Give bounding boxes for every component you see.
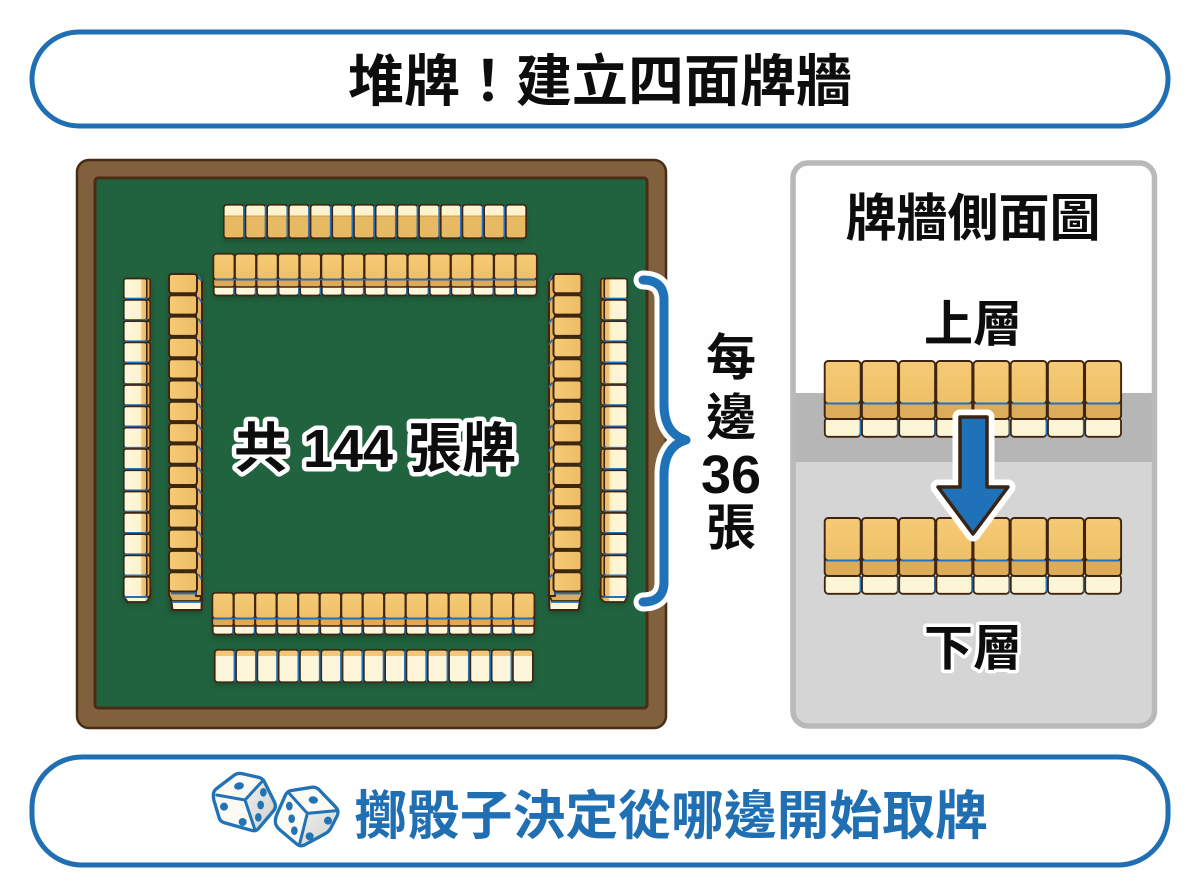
side label: 36 tiles per side: 張 — [706, 500, 756, 556]
title text: 堆牌！建立四面牌牆 — [348, 50, 852, 113]
side label: 36 tiles per side: 每 — [706, 330, 756, 386]
grey band — [793, 393, 1154, 462]
right wall: outer column — [600, 279, 628, 602]
soft tile shadows — [123, 207, 628, 686]
bottom banner text: 擲骰子決定從哪邊開始取牌 — [354, 787, 988, 846]
lower tile stack — [825, 518, 1121, 594]
icon: right die — [275, 787, 338, 846]
left wall: outer column — [124, 279, 150, 602]
side label: 36 tiles per side: 36 — [701, 445, 761, 505]
bottom banner — [32, 757, 1168, 865]
label: upper layer: 上層 — [924, 298, 1022, 352]
brace: one side — [643, 280, 686, 602]
arrow: upper onto lower — [938, 417, 1008, 534]
side label: 36 tiles per side — [701, 330, 761, 556]
center label: total tiles: 共 144 張牌 — [234, 419, 516, 479]
panel: wall side view — [793, 163, 1154, 726]
title banner — [32, 32, 1168, 126]
far wall: top row — [224, 205, 526, 238]
icon: dice — [213, 773, 338, 846]
left wall: inner column — [169, 274, 202, 610]
lower grey area — [793, 462, 1154, 726]
far wall: second row — [213, 254, 537, 296]
near wall: inner row — [212, 593, 534, 634]
side label: 36 tiles per side: 邊 — [706, 390, 756, 446]
panel heading: 牌牆側面圖 — [845, 190, 1101, 247]
upper tile stack — [825, 361, 1121, 437]
near wall: outer row — [215, 650, 533, 682]
icon: left die — [213, 773, 275, 831]
panel: mahjong table — [77, 160, 666, 728]
right wall: inner column — [549, 274, 582, 610]
panel border — [793, 163, 1154, 726]
label: lower layer: 下層 — [924, 622, 1022, 676]
